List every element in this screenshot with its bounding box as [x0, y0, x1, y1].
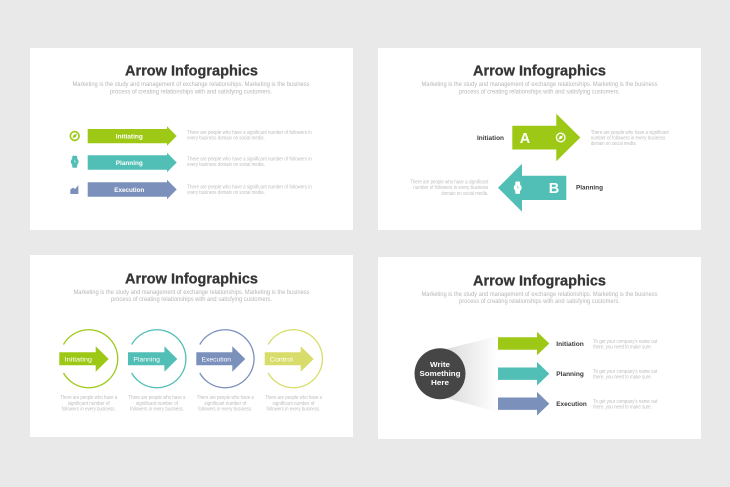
- description: A: There are people who have a significant: [591, 130, 669, 136]
- arrow A: [512, 114, 580, 161]
- subtitle: Marketing is the study and management of exchange relationships. Marketing is the business: [72, 81, 310, 88]
- description: Control: There are people who have a: [265, 395, 322, 401]
- description: B: [410, 179, 489, 197]
- label: Initiation: Initiation: [477, 135, 504, 142]
- arrow: Initiating: Initiating: [116, 133, 143, 140]
- description: Execution: [593, 399, 658, 411]
- subtitle: Marketing is the study and management of exchange relationships. Marketing is the business: [422, 81, 658, 88]
- title: Arrow Infographics: [125, 62, 258, 79]
- description: Control: followers in every business.: [266, 407, 320, 413]
- description: Initiating: every business domain on social media.: [187, 136, 265, 142]
- circle: Write Something Here: [414, 348, 466, 399]
- description: Initiation: there, you need to make sure.: [593, 344, 652, 350]
- description: Execution: followers in every business.: [198, 407, 252, 413]
- description: Execution: There are people who have a significant number of followers in: [187, 184, 312, 190]
- description: Planning: There are people who have a: [128, 395, 186, 401]
- subtitle: [72, 81, 310, 96]
- description: Execution: [197, 395, 254, 413]
- subtitle: process of creating relationships with and satisfying customers.: [110, 89, 272, 96]
- panel: circled arrows: [30, 255, 353, 437]
- subtitle: [422, 291, 658, 305]
- arrow: Initiation: [498, 332, 549, 355]
- description: Execution: There are people who have a: [197, 395, 254, 401]
- title: Arrow Infographics: [125, 270, 258, 287]
- description: Execution: significant number of: [204, 401, 247, 407]
- circle: Write Something Here: Here: [431, 378, 449, 387]
- panel: circle with fan of arrows: [378, 257, 701, 439]
- subtitle: process of creating relationships with and satisfying customers.: [111, 296, 272, 303]
- circle: Write Something Here: Something: [420, 369, 461, 378]
- description: Initiating: followers in every business.: [62, 407, 116, 413]
- description: Planning: there, you need to make sure.: [593, 375, 652, 381]
- description: Initiation: [593, 339, 658, 350]
- circled arrow: Initiating: [59, 330, 118, 388]
- label: Planning: Planning: [576, 185, 603, 192]
- arrow: Execution: [498, 392, 549, 416]
- arrow B: B: [549, 181, 559, 197]
- description: Control: [265, 395, 322, 413]
- description: Planning: There are people who have a significant number of followers in: [187, 156, 312, 162]
- description: Planning: [128, 395, 186, 413]
- circle: Write Something Here: Write: [430, 360, 450, 369]
- icon: compass: [70, 132, 79, 140]
- description: B: number of followers in every business: [413, 185, 489, 191]
- subtitle: [74, 289, 310, 303]
- subtitle: process of creating relationships with and satisfying customers.: [459, 89, 620, 96]
- arrow: Execution: Execution: [114, 187, 144, 194]
- subtitle: [422, 81, 658, 96]
- arrow A: A: [520, 131, 531, 147]
- circled arrow: Control: [265, 330, 322, 388]
- circled arrow: Control: Control: [270, 356, 293, 363]
- description: Control: significant number of: [272, 401, 315, 407]
- label: Initiation: Initiation: [556, 341, 584, 348]
- arrow B: [498, 164, 566, 212]
- description: Execution: To get your company's name out: [593, 399, 658, 405]
- panel: three stacked arrows: [30, 48, 353, 230]
- subtitle: process of creating relationships with and satisfying customers.: [459, 298, 620, 305]
- panel: A and B arrows: [378, 48, 701, 230]
- description: Execution: every business domain on social media.: [187, 190, 265, 196]
- description: A: number of followers in every business: [591, 136, 666, 142]
- description: Planning: To get your company's name out: [593, 369, 658, 375]
- arrow: Planning: Planning: [116, 160, 143, 167]
- description: Initiating: significant number of: [68, 401, 110, 407]
- arrow: Initiating: [88, 126, 177, 146]
- description: Planning: every business domain on social media.: [187, 162, 265, 168]
- circled arrow: Execution: Execution: [202, 356, 231, 363]
- title: Arrow Infographics: [473, 272, 606, 289]
- subtitle: Marketing is the study and management of exchange relationships. Marketing is the business: [422, 291, 658, 298]
- gradient beam: [446, 336, 498, 412]
- icon: watch: [514, 182, 522, 194]
- description: Planning: [187, 156, 312, 168]
- label: Planning: Planning: [556, 371, 584, 378]
- arrow: Planning: [88, 153, 177, 172]
- description: Execution: there, you need to make sure.: [593, 405, 652, 411]
- title: Arrow Infographics: [473, 62, 606, 79]
- description: Initiating: There are people who have a: [60, 395, 117, 401]
- circled arrow: Initiating: Initiating: [65, 356, 92, 363]
- description: B: domain on social media.: [441, 191, 488, 197]
- circled arrow: Execution: [196, 330, 254, 388]
- icon: watch: [71, 156, 79, 168]
- description: Execution: [187, 184, 312, 196]
- arrow: Planning: [498, 362, 549, 386]
- description: Initiating: There are people who have a significant number of followers in: [187, 130, 312, 136]
- description: Initiating: [187, 130, 312, 142]
- description: Planning: significant number of: [136, 401, 179, 407]
- description: Initiating: [60, 395, 117, 413]
- subtitle: Marketing is the study and management of exchange relationships. Marketing is the business: [74, 289, 310, 296]
- description: Initiation: To get your company's name out: [593, 339, 658, 345]
- description: A: domain on social media.: [591, 141, 637, 147]
- circled arrow: Planning: [128, 330, 186, 388]
- description: A: [591, 130, 669, 147]
- icon: chart: [70, 185, 78, 194]
- arrow: Execution: [88, 180, 177, 199]
- description: Planning: followers in every business.: [130, 407, 184, 413]
- description: Planning: [593, 369, 658, 381]
- label: Execution: Execution: [556, 401, 587, 408]
- description: B: There are people who have a significant: [410, 179, 489, 185]
- icon: compass: [556, 133, 565, 142]
- circled arrow: Planning: Planning: [133, 356, 160, 363]
